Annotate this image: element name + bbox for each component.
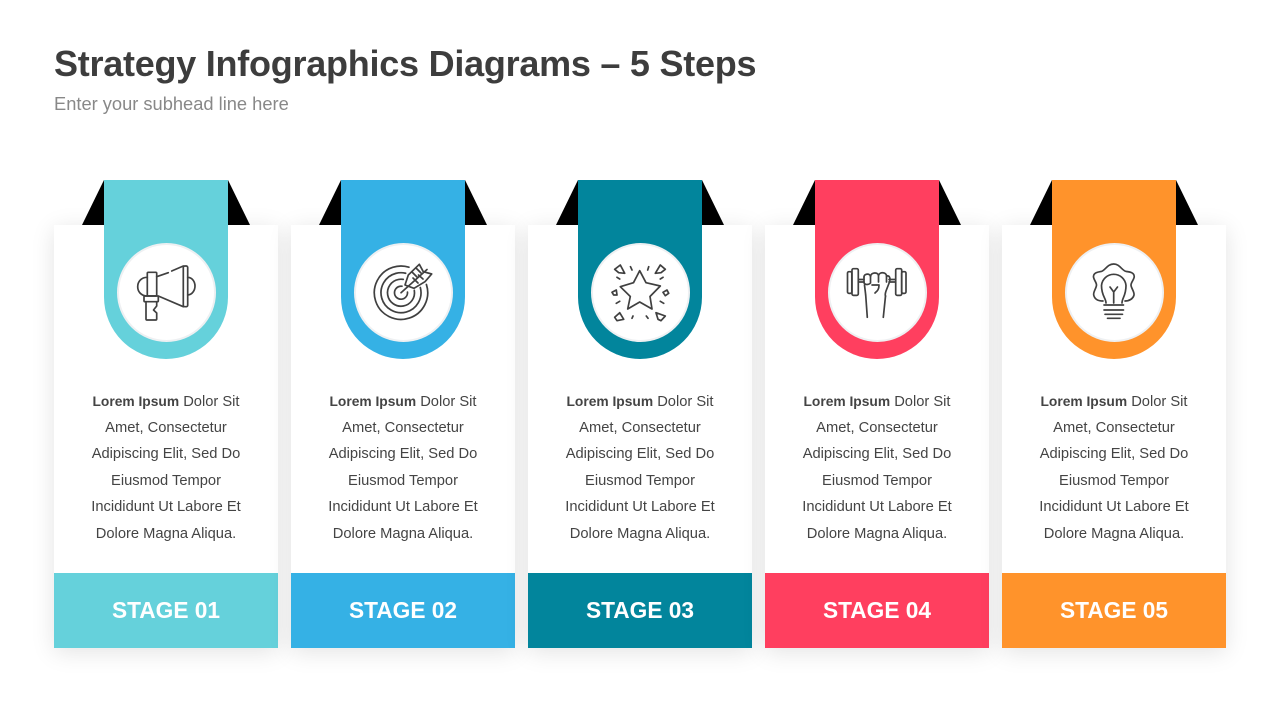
description: Adipiscing Elit, Sed Do [1040, 446, 1188, 462]
description: Lorem Ipsum Dolor Sit [329, 394, 477, 410]
description [802, 394, 952, 542]
description: Eiusmod Tempor [822, 473, 932, 489]
icon circle [1065, 243, 1164, 342]
description: Amet, Consectetur [105, 420, 227, 436]
icon: target with arrow [373, 263, 432, 320]
icon circle [117, 243, 216, 342]
icon circle [354, 243, 453, 342]
description: Dolore Magna Aliqua. [1044, 526, 1184, 542]
subhead: Enter your subhead line here [54, 93, 289, 114]
description: Lorem Ipsum Dolor Sit [1040, 394, 1188, 410]
description: Lorem Ipsum Dolor Sit [566, 394, 714, 410]
ribbon fold [556, 180, 724, 225]
stage label [528, 573, 752, 648]
ribbon [341, 180, 465, 359]
description: Amet, Consectetur [1053, 420, 1175, 436]
description: Dolore Magna Aliqua. [570, 526, 710, 542]
description: Incididunt Ut Labore Et [565, 499, 715, 515]
ribbon fold [1030, 180, 1198, 225]
description: Amet, Consectetur [816, 420, 938, 436]
title: Strategy Infographics Diagrams – 5 Steps [54, 43, 756, 84]
panel: stage 05 [996, 180, 1232, 658]
description: Incididunt Ut Labore Et [328, 499, 478, 515]
card body [528, 225, 752, 648]
icon: megaphone [136, 265, 196, 321]
card body [54, 225, 278, 648]
description: Adipiscing Elit, Sed Do [566, 446, 714, 462]
description [328, 394, 478, 542]
description: Dolore Magna Aliqua. [96, 526, 236, 542]
description: Adipiscing Elit, Sed Do [803, 446, 951, 462]
card body [765, 225, 989, 648]
stage label [54, 573, 278, 648]
icon circle [591, 243, 690, 342]
stage label [1002, 573, 1226, 648]
description: Amet, Consectetur [579, 420, 701, 436]
description: Incididunt Ut Labore Et [802, 499, 952, 515]
description: Adipiscing Elit, Sed Do [92, 446, 240, 462]
stage label: STAGE 03 [586, 597, 694, 623]
description: Adipiscing Elit, Sed Do [329, 446, 477, 462]
description [91, 394, 241, 542]
description: Eiusmod Tempor [585, 473, 695, 489]
panel: stage 01 [48, 180, 284, 658]
description: Eiusmod Tempor [1059, 473, 1169, 489]
ribbon [815, 180, 939, 359]
stage label [765, 573, 989, 648]
icon: light bulb in gear [1092, 263, 1136, 320]
icon: dumbbell in fist [846, 268, 907, 318]
ribbon fold [793, 180, 961, 225]
card body [1002, 225, 1226, 648]
ribbon [578, 180, 702, 359]
description [1039, 394, 1189, 542]
card body [291, 225, 515, 648]
icon circle [828, 243, 927, 342]
description: Dolore Magna Aliqua. [807, 526, 947, 542]
description: Lorem Ipsum Dolor Sit [92, 394, 240, 410]
stage label: STAGE 01 [112, 597, 220, 623]
ribbon fold [82, 180, 250, 225]
panel: stage 02 [285, 180, 521, 658]
description: Eiusmod Tempor [348, 473, 458, 489]
stage label: STAGE 04 [823, 597, 931, 623]
description: Incididunt Ut Labore Et [91, 499, 241, 515]
description: Incididunt Ut Labore Et [1039, 499, 1189, 515]
ribbon [1052, 180, 1176, 359]
stage label: STAGE 02 [349, 597, 457, 623]
panel: stage 03 [522, 180, 758, 658]
ribbon [104, 180, 228, 359]
ribbon fold [319, 180, 487, 225]
stage label [291, 573, 515, 648]
panel: stage 04 [759, 180, 995, 658]
description: Dolore Magna Aliqua. [333, 526, 473, 542]
description [565, 394, 715, 542]
icon: star burst [611, 264, 670, 322]
description: Amet, Consectetur [342, 420, 464, 436]
stage label: STAGE 05 [1060, 597, 1168, 623]
description: Lorem Ipsum Dolor Sit [803, 394, 951, 410]
description: Eiusmod Tempor [111, 473, 221, 489]
